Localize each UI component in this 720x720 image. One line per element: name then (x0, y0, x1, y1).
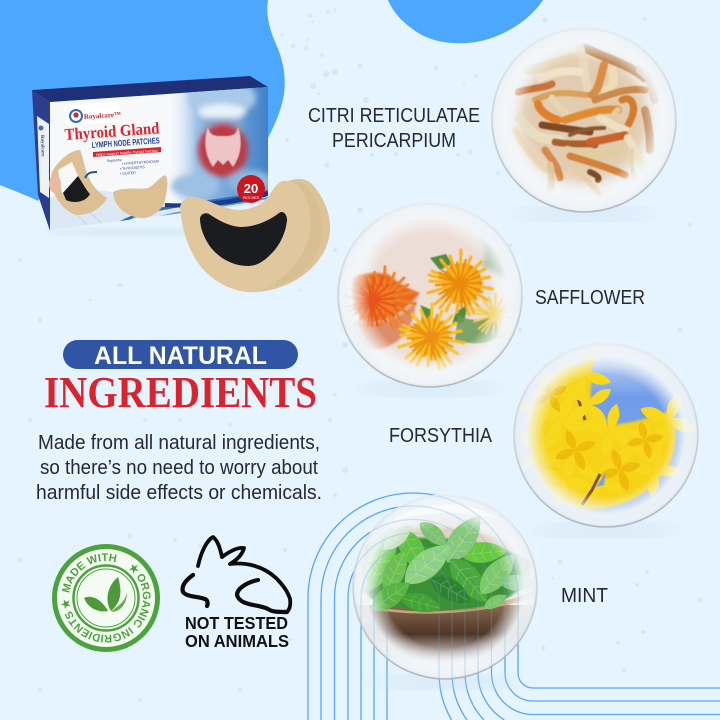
box red band: Helps support healthy thyroid function (96, 149, 158, 157)
badge circular text: MADE WITH (62, 553, 117, 593)
arch lines seen through glass (354, 496, 519, 679)
sphere photo: dried peel (492, 28, 676, 212)
sphere: mint (352, 495, 538, 689)
label: mint: MINT (561, 585, 608, 607)
box supports list: Supports: (107, 158, 122, 163)
badge circular text (61, 553, 151, 642)
sphere: forsythia (513, 342, 699, 536)
20 patches badge (237, 175, 265, 203)
front patch (180, 181, 311, 292)
box supports list: • HYPERTHYROIDISM (122, 159, 159, 166)
decorative concentric arch lines (308, 493, 720, 720)
sphere: citri reticulatae pericarpium (492, 28, 676, 221)
arrow on box (85, 172, 97, 178)
20 patches badge: PATCHES (243, 196, 260, 200)
sphere shadow (512, 207, 656, 221)
glass rim (514, 343, 698, 527)
sphere shadow (534, 523, 678, 537)
label: forsythia: FORSYTHIA (389, 425, 493, 447)
20 patches badge: 20 (244, 181, 258, 196)
heading pill: all natural: ALL NATURAL (94, 342, 267, 370)
sphere photo: forsythia blossoms (515, 344, 697, 526)
sphere photo: mint in bowl (352, 495, 538, 679)
glass rim (353, 495, 537, 679)
heading: ingredients: INGREDIENTS (44, 368, 317, 417)
box top and side: Royalcare (39, 135, 45, 157)
label: citri reticulatae pericarpium: CITRI RETICULATAE (308, 105, 480, 127)
badge circular text: ★ (61, 600, 70, 609)
box shadow (45, 228, 255, 236)
label: safflower: SAFFLOWER (535, 287, 645, 309)
glass rim (492, 28, 676, 212)
blue blob top centre (388, 0, 543, 43)
patch stack (180, 179, 330, 292)
brand logo (63, 102, 121, 126)
heading pill: all natural (63, 340, 298, 370)
black pad (200, 212, 287, 266)
box front face (50, 87, 268, 230)
badge circular text: ORGANIC (134, 574, 151, 628)
not tested text: NOT TESTED (185, 613, 288, 633)
icon: rabbit not tested on animals (183, 537, 290, 651)
product: box and patches (32, 76, 330, 292)
box top and side (32, 76, 268, 231)
description text: harmful side effects or chemicals. (36, 482, 322, 504)
blue blob top left (0, 0, 285, 201)
glass rim (338, 203, 522, 387)
not tested text (185, 613, 289, 651)
sphere: safflower (338, 203, 522, 396)
not tested text: ON ANIMALS (185, 631, 289, 651)
patch on box being peeled (49, 150, 107, 215)
badge: made with organic ingredients (52, 544, 160, 652)
badge circular text: ★ (129, 564, 138, 574)
description text: so there’s no need to worry about (40, 457, 318, 479)
box subtitle: LYMPH NODE PATCHES (91, 135, 160, 150)
label: citri reticulatae pericarpium (308, 105, 480, 152)
box title: Thyroid Gland (64, 118, 160, 144)
box supports list: • GOITER (120, 171, 136, 176)
label: citri reticulatae pericarpium: PERICARPIUM (332, 130, 456, 152)
box supports list (107, 158, 159, 176)
box supports list: • THYROIDITIS (120, 165, 146, 171)
sphere shadow (373, 675, 517, 689)
small patch on box (113, 175, 167, 218)
icon: leaf check (84, 577, 127, 612)
brand logo: Royalcare™ (84, 110, 121, 121)
sphere shadow (358, 382, 502, 396)
description text (36, 432, 322, 504)
description text: Made from all natural ingredients, (38, 432, 320, 454)
rabbit outline (183, 537, 290, 612)
sphere photo: safflower blooms (338, 203, 522, 387)
badge circular text: INGRIDIENTS (65, 612, 134, 642)
